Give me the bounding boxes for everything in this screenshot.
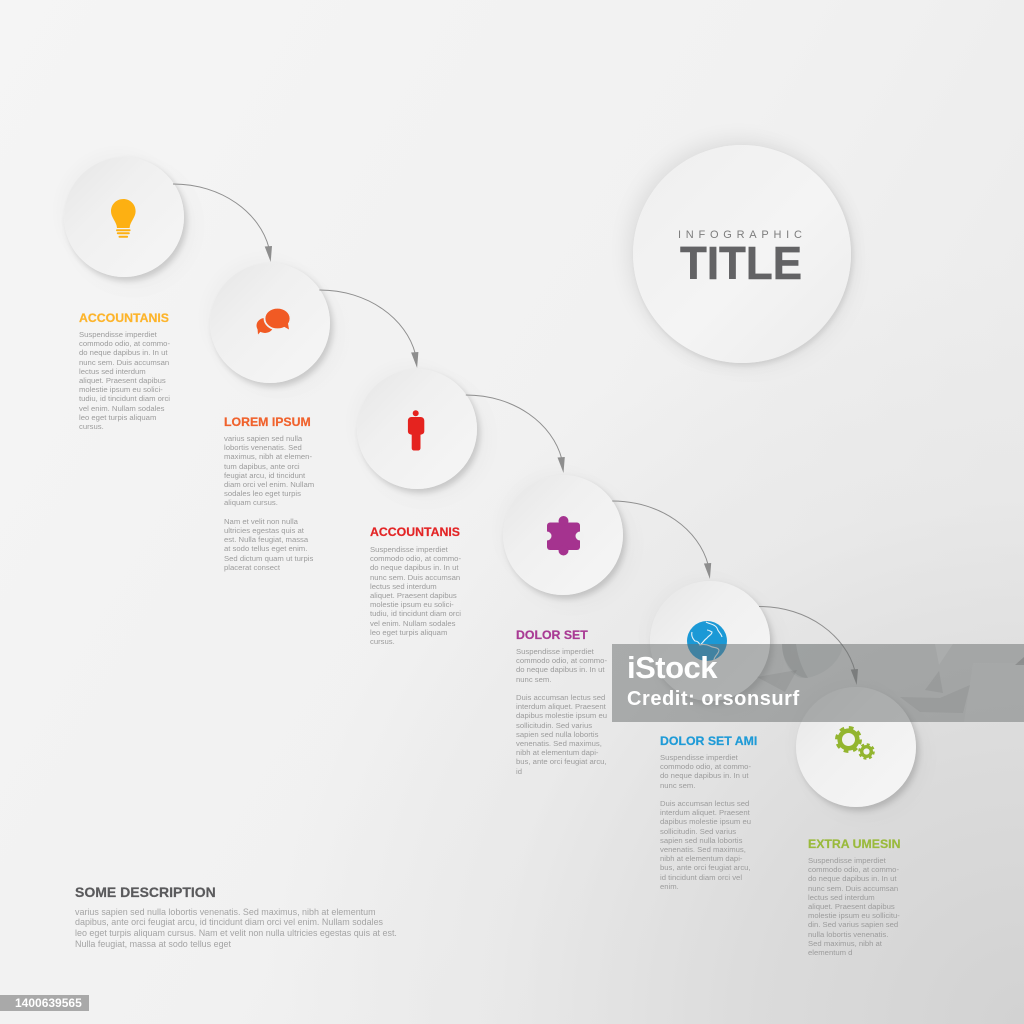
text: step 3: Suspendisse imperdiet (370, 545, 448, 554)
text: step 4: nibh at elementum dapi- (516, 748, 598, 757)
heading: step 5: DOLOR SET AMI (660, 734, 757, 748)
heading: step 1: ACCOUNTANIS (79, 311, 169, 325)
text: description: varius sapien sed nulla lobortis venenatis. Sed maximus, nibh at elementum (75, 906, 376, 916)
text: step 6: molestie ipsum eu sollicitu- (808, 911, 900, 920)
text: step 2: feugiat arcu, id tincidunt (224, 471, 305, 480)
text: step 2: tum dapibus, ante orci (224, 462, 300, 471)
text: step 5: id tincidunt diam orci vel (660, 873, 742, 882)
watermark band (612, 644, 1024, 722)
text: step 4: id (516, 767, 522, 776)
text: step 1: tudiu, id tincidunt diam orci (79, 394, 170, 403)
text: step 6: Sed maximus, nibh at (808, 939, 882, 948)
text: step 3 (370, 545, 461, 646)
text: step 1: aliquet. Praesent dapibus (79, 376, 166, 385)
text: description: Nulla feugiat, massa at sodo tellus eget (75, 939, 231, 949)
text: step 5: enim. (660, 882, 679, 891)
text: step 2: Nam et velit non nulla (224, 517, 298, 526)
watermark: iStock: iStock (627, 650, 717, 685)
panel: step 1 circle (64, 157, 184, 277)
text: step 6: aliquet. Praesent dapibus (808, 902, 895, 911)
text: step 6: Suspendisse imperdiet (808, 856, 886, 865)
arrow: step 2 to 3 (319, 290, 418, 368)
text: step 5: bus, ante orci feugiat arcu, (660, 863, 751, 872)
panel: step 2 circle (210, 263, 330, 383)
panel: step 5 circle (650, 581, 770, 701)
text: description (75, 906, 397, 949)
text: step 1: Suspendisse imperdiet (79, 330, 157, 339)
heading: step 3: ACCOUNTANIS (370, 525, 460, 539)
icon: globe (687, 621, 727, 661)
text: step 1: vel enim. Nullam sodales (79, 404, 164, 413)
text: step 4: dapibus molestie ipsum eu (516, 711, 607, 720)
text: step 4: venenatis. Sed maximus, (516, 739, 602, 748)
text: step 4: Duis accumsan lectus sed (516, 693, 605, 702)
text: step 4: bus, ante orci feugiat arcu, (516, 757, 607, 766)
icon: puzzle piece (547, 516, 580, 556)
text: step 4: Suspendisse imperdiet (516, 647, 594, 656)
heading: step 6: EXTRA UMESIN (808, 837, 900, 851)
text: step 5: sapien sed nulla lobortis (660, 836, 742, 845)
text: step 5: venenatis. Sed maximus, (660, 845, 746, 854)
text: step 3: molestie ipsum eu solici- (370, 600, 454, 609)
panel: step 6 circle (796, 687, 916, 807)
text: step 6: nunc sem. Duis accumsan (808, 884, 898, 893)
title eyebrow: INFOGRAPHIC (678, 228, 807, 240)
text: step 2: maximus, nibh at elemen- (224, 452, 312, 461)
heading: step 4: DOLOR SET (516, 628, 588, 642)
text: step 2: est. Nulla feugiat, massa (224, 535, 308, 544)
arrow: step 5 to 6 (759, 606, 858, 685)
text: step 5: nunc sem. (660, 781, 695, 790)
text: step 5: nibh at elementum dapi- (660, 854, 742, 863)
text: step 2: ultricies egestas quis at (224, 526, 304, 535)
text: step 4: commodo odio, at commo- (516, 656, 607, 665)
text: step 6 (808, 856, 900, 957)
text: step 2: aliquam cursus. (224, 498, 278, 507)
text: step 6: do neque dapibus in. In ut (808, 874, 896, 883)
text: step 6: elementum d (808, 948, 852, 957)
image id badge (0, 995, 89, 1011)
text: step 2: at sodo tellus eget enim. (224, 544, 307, 553)
text: step 5: commodo odio, at commo- (660, 762, 751, 771)
arrow: step 4 to 5 (612, 501, 711, 579)
text: step 4 (516, 647, 607, 776)
icon: light bulb (111, 199, 136, 238)
text: step 5: Duis accumsan lectus sed (660, 799, 749, 808)
text: step 5: Suspendisse imperdiet (660, 753, 738, 762)
watermark: credit: Credit: orsonsurf (627, 688, 800, 710)
text: step 3: vel enim. Nullam sodales (370, 619, 455, 628)
text: step 3: do neque dapibus in. In ut (370, 563, 458, 572)
text: step 4: sapien sed nulla lobortis (516, 730, 598, 739)
text: step 5 (660, 753, 751, 891)
arrow: step 1 to 2 (173, 184, 272, 262)
panel: step 4 circle (503, 475, 623, 595)
text: step 1: leo eget turpis aliquam (79, 413, 156, 422)
panel: title circle (633, 145, 851, 363)
heading: description: SOME DESCRIPTION (75, 884, 216, 900)
text: step 2: varius sapien sed nulla (224, 434, 302, 443)
text: step 3: nunc sem. Duis accumsan (370, 573, 460, 582)
text: step 3: tudiu, id tincidunt diam orci (370, 609, 461, 618)
text: step 3: commodo odio, at commo- (370, 554, 461, 563)
heading: step 2: LOREM IPSUM (224, 415, 311, 429)
text: step 5: do neque dapibus in. In ut (660, 771, 748, 780)
text: description: dapibus, ante orci feugiat arcu, id tincidunt diam orci vel enim. Nullam sodales (75, 917, 383, 927)
text: step 1: do neque dapibus in. In ut (79, 348, 167, 357)
text: step 4: nunc sem. (516, 675, 551, 684)
text: step 6: din. Sed varius sapien sed (808, 920, 898, 929)
arrow: step 3 to 4 (466, 395, 565, 473)
text: step 6: commodo odio, at commo- (808, 865, 899, 874)
text: step 1 (79, 330, 170, 431)
text: step 1: lectus sed interdum (79, 367, 146, 376)
text: step 4: sollicitudin. Sed varius (516, 721, 592, 730)
text: step 6: lectus sed interdum (808, 893, 875, 902)
text: step 3: aliquet. Praesent dapibus (370, 591, 457, 600)
text: step 2 (224, 434, 314, 572)
text: step 2: placerat consect (224, 563, 280, 572)
icon: gears (835, 726, 875, 760)
text: description: leo eget turpis aliquam cursus. Nam et velit non nulla ultricies egestas quis at est. (75, 928, 397, 938)
text: step 5: sollicitudin. Sed varius (660, 827, 736, 836)
text: step 5: dapibus molestie ipsum eu (660, 817, 751, 826)
text: step 4: do neque dapibus in. In ut (516, 665, 604, 674)
text: step 3: lectus sed interdum (370, 582, 437, 591)
text: step 6: nulla lobortis venenatis. (808, 930, 888, 939)
text: step 1: nunc sem. Duis accumsan (79, 358, 169, 367)
image id badge: 1400639565 (15, 996, 82, 1010)
text: step 1: molestie ipsum eu solici- (79, 385, 163, 394)
watermark facets (758, 644, 1024, 713)
icon: speech bubbles (256, 308, 290, 334)
text: step 3: leo eget turpis aliquam (370, 628, 447, 637)
text: step 2: lobortis venenatis. Sed (224, 443, 302, 452)
text: step 5: interdum aliquet. Praesent (660, 808, 750, 817)
text: step 3: cursus. (370, 637, 395, 646)
panel: step 3 circle (357, 369, 477, 489)
text: step 2: Sed dictum quam ut turpis (224, 554, 313, 563)
text: step 2: diam orci vel enim. Nullam (224, 480, 314, 489)
title: TITLE (680, 236, 802, 288)
text: step 1: commodo odio, at commo- (79, 339, 170, 348)
text: step 2: sodales leo eget turpis (224, 489, 301, 498)
icon: person (408, 410, 424, 450)
text: step 4: interdum aliquet. Praesent (516, 702, 606, 711)
text: step 1: cursus. (79, 422, 104, 431)
